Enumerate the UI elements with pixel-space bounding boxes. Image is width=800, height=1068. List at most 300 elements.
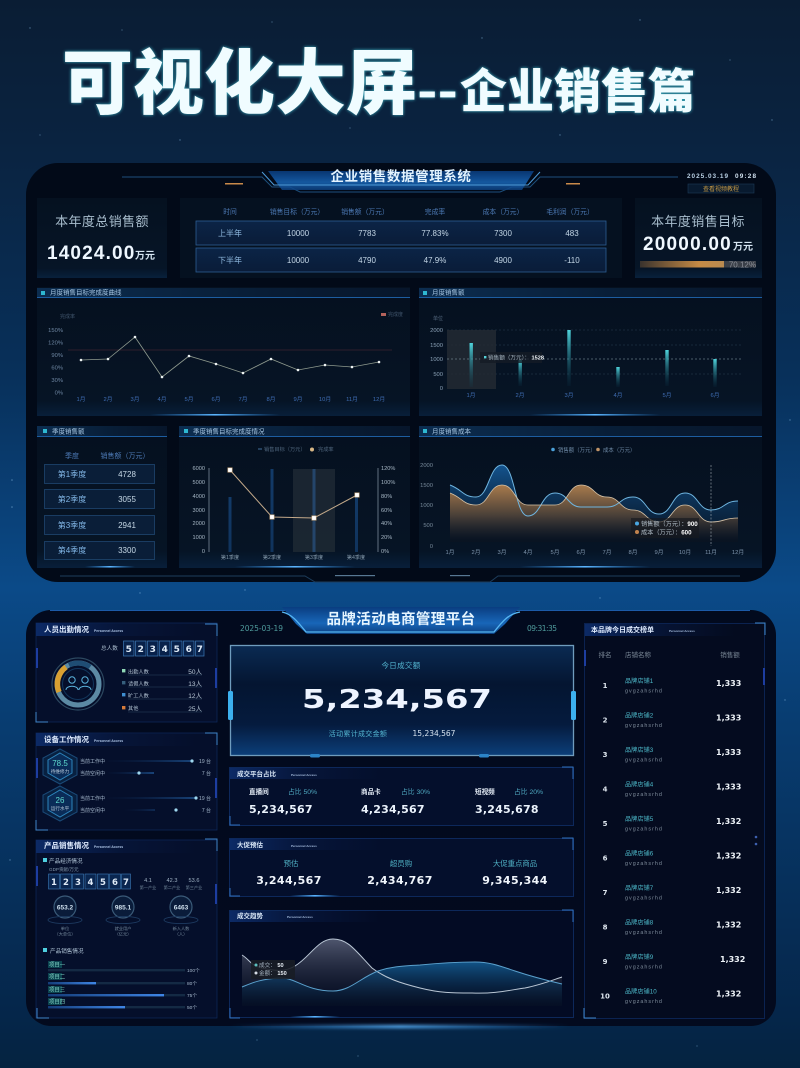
panel: platform share: 短视频	[475, 787, 495, 796]
sales values: 1,332	[716, 817, 741, 826]
ranking numbers: 1	[603, 682, 608, 690]
panel: product sales status	[36, 839, 217, 1018]
panel: quarterly completion chart: 80%	[381, 494, 392, 500]
product economy subsection: 7	[123, 878, 129, 888]
panel: attendance: 总人数	[101, 644, 118, 652]
stat circles: 985.1	[115, 904, 132, 912]
hexagon: 78.5	[43, 749, 77, 784]
panel: quarterly completion chart	[179, 426, 410, 568]
store names: 品牌店铺5	[625, 815, 654, 823]
quarter rows: 3055	[118, 495, 136, 504]
dashboard header: 2025.03.19	[687, 173, 728, 180]
store codes: gvgzahsrhd	[625, 861, 663, 867]
equipment tracks: 当前工作中	[80, 758, 105, 765]
panel: monthly completion curve: 90%	[51, 353, 63, 359]
store names: 品牌店铺4	[625, 780, 654, 788]
dashboard header: 查看视频教程	[703, 185, 739, 193]
product economy subsection: 42.3	[167, 878, 177, 884]
panel: monthly completion curve: 8月	[266, 396, 276, 403]
panel: monthly completion curve: 4月	[157, 396, 167, 403]
tooltip: 成本（万元）：600	[641, 528, 692, 536]
table row: second half: 10000	[287, 256, 310, 265]
product progress bars: 产品销售情况	[50, 947, 84, 955]
KPI: annual sales target: 20000.00	[643, 234, 732, 255]
donut	[52, 658, 104, 710]
panel: quarterly completion chart: 100%	[381, 480, 395, 486]
panel: today's transaction total: 活动累计成交金额	[329, 729, 387, 738]
store names: 品牌店铺7	[625, 884, 654, 892]
completion line	[228, 468, 359, 520]
equipment tracks: 当前空闲中	[80, 807, 105, 814]
KPI: total annual sales: 本年度总销售额	[55, 214, 149, 229]
panel: quarterly completion chart: 3000	[193, 508, 205, 514]
stat circles: 653.2	[57, 904, 74, 912]
panel: monthly completion curve: 2月	[103, 396, 113, 403]
platform header: 品牌活动电商管理平台	[326, 610, 476, 628]
store codes: gvgzahsrhd	[625, 758, 663, 764]
digit boxes: 2	[138, 645, 144, 655]
tooltip	[631, 518, 699, 538]
panel: monthly completion curve: 5月	[184, 396, 194, 403]
hexagon: 78.5: 78.5	[52, 759, 68, 768]
panel: platform share: 占比 30%	[401, 787, 430, 796]
panel: today's store ranking: 销售额	[720, 650, 740, 659]
panel: attendance: 人员出勤情况	[44, 624, 89, 634]
sales values: 1,332	[716, 852, 741, 860]
panel: monthly sales vs cost: 12月	[732, 549, 744, 556]
panel: monthly sales vs cost: 2000	[420, 463, 433, 469]
bars	[228, 469, 358, 552]
panel: quarterly completion chart: 第3季度	[305, 553, 323, 561]
store codes: gvgzahsrhd	[625, 999, 663, 1005]
store codes: gvgzahsrhd	[625, 930, 663, 936]
product progress bars	[43, 947, 200, 1011]
panel: monthly completion curve: 120%	[48, 340, 63, 346]
store names: 品牌店铺1	[625, 677, 654, 685]
hexagon: 26	[43, 786, 77, 821]
panel: monthly sales vs cost: 500	[423, 523, 433, 529]
digit boxes: 6	[186, 645, 192, 655]
sales values: 1,333	[716, 714, 741, 722]
stat circles: 单位	[61, 925, 69, 932]
panel: monthly sales vs cost: 成本（万元）	[603, 446, 635, 454]
store codes: gvgzahsrhd	[625, 896, 663, 902]
tooltip	[480, 352, 544, 363]
attendance legend	[122, 668, 202, 713]
store names: 品牌店铺10	[625, 988, 657, 996]
panel: platform share: 成交平台占比	[237, 769, 276, 778]
store names: 品牌店铺2	[625, 712, 654, 720]
quarter rows: 第3季度	[58, 520, 86, 530]
table row: first half: 483	[565, 229, 579, 238]
tooltip: 成交： 50	[259, 961, 284, 969]
panel: platform share: 占比 20%	[514, 787, 543, 796]
panel: monthly completion curve: 7月	[238, 396, 248, 403]
panel: promotion forecast: 预估	[284, 859, 299, 868]
panel: platform share: Personnel Access	[291, 773, 317, 777]
panel: enterprise sales dashboard	[26, 163, 776, 582]
panel: monthly sales vs cost: 月度销售成本	[432, 426, 472, 436]
panel: monthly completion curve: 30%	[51, 378, 63, 384]
panel: transaction trend	[230, 910, 574, 1018]
panel: quarterly completion chart: 季度销售目标完成度情况	[193, 426, 265, 436]
half-year sales table	[180, 198, 622, 278]
attendance legend: 其他	[128, 704, 138, 712]
KPI: total annual sales: 14024.00	[47, 243, 135, 264]
table row: second half: 4790	[358, 256, 376, 265]
panel: quarterly completion chart: 20%	[381, 535, 392, 541]
panel: monthly sales vs cost: 9月	[654, 549, 664, 556]
panel: quarterly completion chart: 60%	[381, 508, 392, 514]
panel: monthly sales bars: 500	[433, 372, 443, 378]
title	[62, 27, 695, 129]
panel: promotion forecast: 3,244,567	[256, 874, 322, 887]
panel: quarterly completion chart: 0%	[381, 549, 389, 555]
hexagon: 78.5: 待维修力	[51, 768, 70, 775]
platform header	[240, 607, 557, 634]
panel: quarterly completion chart: 0	[202, 549, 205, 555]
quarter rows: 第1季度	[58, 469, 86, 479]
panel: monthly sales bars: 4月	[613, 392, 623, 399]
equipment tracks: 19 台	[199, 795, 211, 802]
panel: today's store ranking: 店铺名称	[625, 650, 652, 659]
tooltip: 金额： 150	[259, 969, 287, 977]
tooltip	[251, 960, 295, 979]
product progress bars: 项目二	[49, 974, 66, 980]
table row: first half	[196, 221, 606, 245]
KPI: annual sales target	[635, 198, 762, 278]
panel: monthly sales vs cost: 3月	[497, 549, 507, 556]
panel: monthly completion curve: 10月	[319, 396, 331, 403]
panel: today's store ranking: Personnel Access	[669, 629, 695, 633]
ranking numbers: 9	[603, 958, 608, 966]
panel: quarterly completion chart: 第2季度	[263, 553, 281, 561]
panel: quarterly completion chart: 完成率	[318, 445, 334, 453]
title: 可视化大屏	[62, 27, 417, 129]
attendance legend: 12人	[188, 692, 202, 700]
digit boxes: 5	[174, 645, 180, 655]
panel: monthly completion curve: 完成率	[60, 313, 75, 320]
half-year sales table: 销售额（万元）	[341, 207, 389, 216]
table row: second half: 47.9%	[424, 256, 446, 265]
attendance legend: 13人	[188, 680, 202, 688]
product economy subsection: 53.6	[189, 878, 199, 884]
equipment tracks: 当前空闲中	[80, 770, 105, 777]
panel: quarterly sales: 季度销售额	[52, 426, 85, 436]
title: 企业销售篇	[460, 53, 695, 122]
table row: second half: -110	[564, 256, 580, 265]
sales values: 1,332	[716, 920, 741, 930]
panel: monthly sales vs cost: 1500	[420, 483, 433, 489]
sales values	[716, 679, 745, 998]
store names	[625, 677, 657, 996]
panel: attendance	[36, 623, 217, 722]
store names: 品牌店铺9	[625, 953, 654, 961]
stat circles: （亿元）	[115, 930, 131, 938]
panel: today's transaction total: 15,234,567	[413, 729, 456, 738]
quarter rows: 第4季度	[58, 545, 86, 555]
equipment tracks	[80, 758, 211, 814]
line chart	[80, 336, 380, 378]
panel: brand e-commerce dashboard	[26, 607, 776, 1026]
panel: monthly sales vs cost: 1月	[445, 549, 455, 556]
store codes: gvgzahsrhd	[625, 723, 663, 729]
panel: monthly sales bars: 6月	[710, 392, 720, 399]
KPI: total annual sales: 万元	[135, 250, 155, 262]
product progress bars: 75个	[187, 993, 197, 999]
KPI: annual sales target: 70.12%	[729, 260, 756, 270]
panel: quarterly completion chart: 1000	[193, 535, 205, 541]
product economy subsection: 4	[88, 878, 94, 888]
panel: quarterly completion chart: 4000	[193, 494, 205, 500]
dashboard header	[122, 168, 756, 193]
product economy subsection	[43, 857, 202, 891]
product progress bars: 100个	[187, 968, 200, 974]
panel: quarterly completion chart: 第4季度	[347, 553, 365, 561]
attendance legend: 25人	[188, 705, 202, 713]
panel: quarterly completion chart: 40%	[381, 521, 392, 527]
panel: monthly completion curve: 1月	[76, 396, 86, 403]
digit boxes: 3	[150, 645, 156, 655]
panel: promotion forecast: 超员购	[390, 859, 412, 868]
panel: monthly sales vs cost: 0	[430, 544, 433, 550]
attendance legend: 出勤人数	[128, 668, 150, 676]
panel: monthly sales vs cost: 4月	[523, 549, 533, 556]
store names: 品牌店铺6	[625, 850, 654, 858]
panel: monthly sales bars: 3月	[564, 392, 574, 399]
ranking numbers: 7	[603, 889, 608, 897]
panel: promotion forecast: 大促预估	[237, 840, 264, 849]
panel: monthly sales bars: 月度销售额	[432, 288, 465, 296]
tooltip: 销售额（万元）：900	[641, 520, 698, 528]
panel: quarterly completion chart: 2000	[193, 521, 205, 527]
panel: product sales status: Personnel Access	[94, 845, 123, 849]
panel: monthly sales vs cost: 6月	[576, 549, 586, 556]
equipment tracks: 7 台	[202, 807, 211, 814]
product economy subsection: 5	[100, 878, 106, 888]
panel: monthly completion curve: 完成度	[388, 311, 403, 318]
panel: monthly sales bars: 1500	[430, 343, 443, 349]
KPI: annual sales target: 万元	[733, 241, 753, 253]
panel: quarterly sales: 季度	[65, 451, 79, 460]
panel: monthly sales bars: 1000	[430, 357, 443, 363]
panel: monthly sales vs cost: 8月	[628, 549, 638, 556]
ranking numbers: 5	[603, 820, 608, 828]
stat circles: （大单位）	[55, 930, 75, 938]
quarter rows: 2941	[118, 521, 136, 530]
product economy subsection: 第一产业	[140, 884, 156, 891]
hexagon: 26: 26	[56, 796, 65, 805]
table row: first half: 上半年	[218, 228, 242, 238]
panel: product sales status: 产品销售情况	[44, 840, 89, 850]
bottom light strip	[230, 1025, 570, 1028]
sales values: 1,332	[720, 955, 745, 964]
stat circles: 新入人数	[173, 925, 190, 932]
KPI: total annual sales	[37, 198, 167, 278]
table row: first half: 7783	[358, 229, 376, 238]
panel: quarterly sales: 销售额（万元）	[100, 451, 150, 460]
attendance legend: 请假人数	[128, 680, 150, 688]
sales values: 1,333	[716, 748, 741, 757]
panel: today's transaction total: 5,234,567	[302, 685, 492, 715]
panel: monthly sales vs cost: 2月	[471, 549, 481, 556]
title: --	[417, 53, 458, 122]
panel: promotion forecast: 2,434,767	[367, 874, 433, 887]
half-year sales table: 成本（万元）	[483, 207, 523, 216]
panel: quarterly completion chart: 120%	[381, 466, 395, 472]
panel: transaction trend: Personnel Access	[287, 915, 313, 919]
sales values: 1,332	[716, 990, 741, 998]
panel: platform share: 占比 50%	[288, 787, 317, 796]
quarter rows: 第2季度	[58, 494, 86, 504]
digit boxes: 5	[126, 645, 132, 655]
ranking numbers: 3	[603, 751, 608, 759]
panel: monthly sales bars: 0	[440, 386, 443, 392]
panel: quarterly completion chart: 销售目标（万元）	[264, 445, 306, 453]
panel: monthly completion curve: 3月	[130, 396, 140, 403]
half-year sales table: 毛利润（万元）	[546, 207, 594, 216]
panel: promotion forecast: 大促重点商品	[493, 859, 537, 868]
panel: monthly completion curve	[37, 287, 410, 416]
panel: monthly completion curve: 6月	[211, 396, 221, 403]
quarter rows: 4728	[118, 470, 136, 479]
product economy subsection: 第二产业	[164, 884, 180, 891]
table row: second half: 4900	[494, 256, 512, 265]
equipment tracks: 7 台	[202, 770, 211, 777]
bar chart	[470, 330, 717, 387]
product progress bars: 项目四	[49, 998, 65, 1006]
panel: monthly sales bars: 2月	[515, 392, 525, 399]
ranking numbers: 6	[603, 854, 608, 862]
dashboard footer	[60, 575, 740, 582]
panel: monthly sales bars	[419, 287, 762, 416]
store codes: gvgzahsrhd	[625, 792, 663, 798]
panel: promotion forecast: Personnel Access	[291, 844, 317, 848]
platform header: 09:31:35	[527, 624, 557, 633]
panel: monthly sales vs cost: 11月	[705, 549, 717, 556]
store names: 品牌店铺3	[625, 746, 654, 754]
panel: monthly sales bars: 1月	[466, 392, 476, 399]
panel: monthly sales bars: 单位	[433, 315, 443, 322]
panel: monthly sales vs cost: 5月	[550, 549, 560, 556]
panel: equipment status: 设备工作情况	[44, 734, 89, 744]
product economy subsection: 4.1	[144, 878, 152, 884]
panel: monthly completion curve: 150%	[48, 328, 63, 334]
panel: quarterly completion chart: 6000	[193, 466, 205, 472]
stat circles: 就业用户	[115, 925, 131, 932]
panel: monthly sales vs cost: 销售额（万元）	[558, 446, 596, 454]
panel: promotion forecast	[230, 838, 574, 896]
table row: first half: 7300	[494, 229, 512, 238]
equipment tracks: 19 台	[199, 758, 211, 765]
digit boxes	[124, 641, 204, 656]
table row: second half	[196, 248, 606, 272]
table row: first half: 77.83%	[421, 229, 449, 238]
ranking numbers: 4	[603, 786, 608, 794]
area chart	[450, 465, 738, 546]
panel: transaction trend: 成交趋势	[237, 911, 264, 920]
ranking numbers: 2	[603, 716, 608, 724]
ranking numbers	[600, 682, 610, 1000]
digit boxes: 7	[197, 645, 203, 655]
stat circles	[48, 896, 198, 938]
product economy subsection: GDP贡献/万元	[49, 866, 79, 873]
product progress bars: 50个	[187, 1005, 197, 1011]
panel: monthly sales vs cost: 7月	[602, 549, 612, 556]
stat circles: （人）	[175, 932, 187, 936]
panel: platform share: 商品卡	[361, 787, 381, 796]
panel: platform share: 5,234,567	[249, 803, 313, 816]
store names: 品牌店铺8	[625, 918, 654, 926]
panel: quarterly completion chart: 第1季度	[221, 553, 239, 561]
panel: promotion forecast: 9,345,344	[482, 874, 548, 887]
store codes: gvgzahsrhd	[625, 826, 663, 832]
panel: today's transaction total	[228, 646, 576, 758]
digit boxes: 4	[162, 645, 168, 655]
product economy subsection: 3	[75, 878, 81, 888]
table row: first half: 10000	[287, 229, 310, 238]
attendance legend: 旷工人数	[128, 692, 150, 700]
sales values: 1,332	[716, 886, 741, 895]
half-year sales table: 时间	[223, 207, 237, 216]
product economy subsection: 6	[112, 878, 118, 888]
panel: platform share: 直播间	[249, 787, 269, 796]
product progress bars: 80个	[187, 981, 197, 987]
panel: today's transaction total: 今日成交额	[382, 660, 421, 670]
panel: today's store ranking: 本品牌今日成交榜单	[591, 625, 654, 634]
ranking numbers: 8	[603, 924, 608, 932]
panel: monthly completion curve: 11月	[346, 396, 358, 403]
product economy subsection: 产品经济情况	[49, 857, 83, 865]
stat circles: 6463	[174, 904, 189, 912]
quarter rows	[44, 464, 154, 560]
panel: monthly sales vs cost	[419, 426, 762, 568]
sales values: 1,333	[716, 782, 741, 792]
KPI: annual sales target: 本年度销售目标	[651, 214, 745, 229]
panel: quarterly completion chart: 5000	[193, 480, 205, 486]
panel: attendance: Personnel Access	[94, 629, 123, 633]
product economy subsection: 2	[63, 878, 69, 888]
panel: platform share	[230, 767, 574, 826]
table row: second half: 下半年	[218, 255, 242, 265]
panel: monthly sales vs cost: 1000	[420, 503, 433, 509]
equipment tracks: 当前工作中	[80, 795, 105, 802]
panel: monthly sales vs cost: 10月	[679, 549, 691, 556]
panel: today's store ranking	[584, 623, 765, 1018]
panel: platform share: 3,245,678	[475, 803, 539, 816]
panel: monthly completion curve: 12月	[373, 396, 385, 403]
store codes	[625, 688, 663, 1005]
panel: monthly completion curve: 0%	[55, 390, 63, 396]
panel: today's store ranking: 排名	[598, 650, 612, 659]
panel: monthly completion curve: 9月	[293, 396, 303, 403]
panel: monthly sales bars: 2000	[430, 328, 443, 334]
panel: monthly sales bars: 5月	[662, 392, 672, 399]
sales values: 1,333	[716, 679, 741, 688]
product economy subsection: 1	[51, 878, 57, 888]
panel: platform share: 4,234,567	[361, 803, 425, 816]
product progress bars: 项目一	[49, 962, 66, 968]
store codes: gvgzahsrhd	[625, 688, 663, 694]
panel: monthly completion curve: 60%	[51, 366, 63, 372]
store codes: gvgzahsrhd	[625, 964, 663, 970]
platform header: 2025-03-19	[240, 624, 283, 633]
attendance legend: 50人	[188, 668, 202, 676]
product progress bars: 项目三	[49, 986, 66, 994]
hexagon: 26: 运行水平	[51, 805, 70, 812]
panel: quarterly sales	[37, 426, 167, 568]
panel: equipment status	[36, 733, 217, 830]
